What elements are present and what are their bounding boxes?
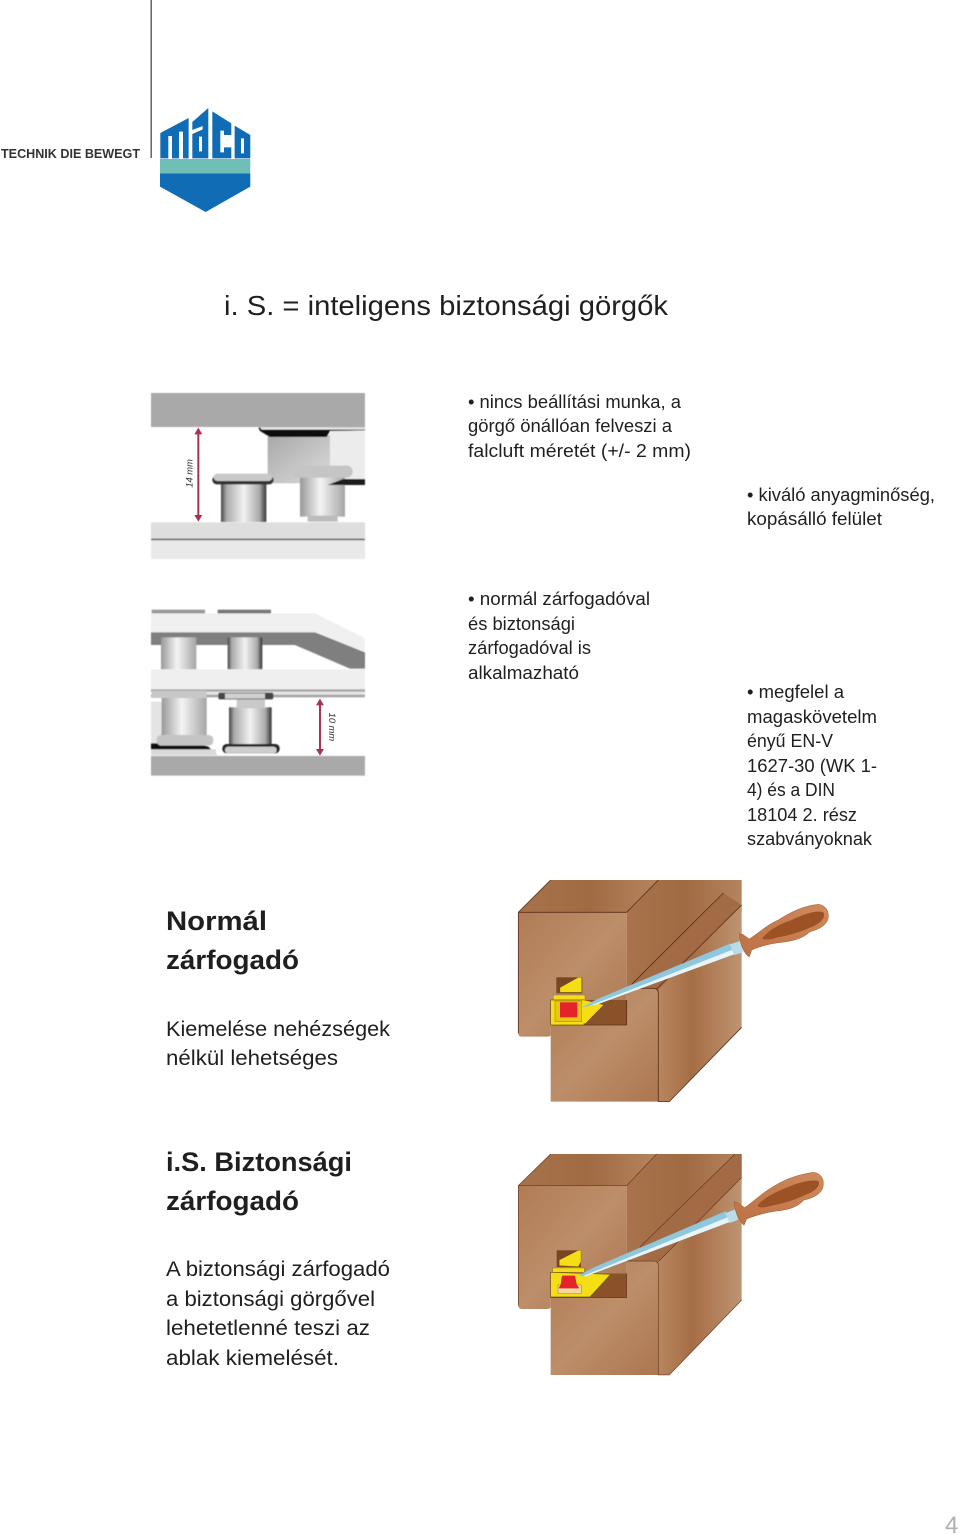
diagram part: yellow safety housing bbox=[551, 1250, 611, 1297]
title: i. S. = inteligens biztonsági görgők bbox=[224, 290, 669, 321]
heading: normal strike plate: Normál bbox=[166, 906, 267, 936]
bullet: strike plate compatibility: alkalmazható bbox=[468, 662, 579, 683]
bullet: material quality: • kiváló anyagminőség, bbox=[747, 484, 935, 505]
bullet: strike plate compatibility bbox=[468, 588, 650, 683]
photo: 10 mm roller gap: 10 mm bbox=[327, 713, 337, 741]
text: normal strike plate description: nélkül lehetséges bbox=[166, 1046, 338, 1070]
text: safety strike plate description: A biztonsági zárfogadó bbox=[166, 1257, 390, 1281]
bullet: strike plate compatibility: és biztonsági bbox=[468, 613, 575, 634]
vertical divider line bbox=[150, 0, 152, 158]
text: safety strike plate description: a biztonsági görgővel bbox=[166, 1287, 375, 1311]
heading: safety strike plate bbox=[166, 1147, 352, 1216]
heading: normal strike plate: zárfogadó bbox=[166, 945, 299, 975]
bullet: material quality bbox=[747, 484, 935, 529]
bullet: standards: magaskövetelm bbox=[747, 706, 877, 727]
bullet: material quality: kopásálló felület bbox=[747, 508, 882, 529]
heading: safety strike plate: zárfogadó bbox=[166, 1186, 299, 1216]
diagram: safety strike plate with screwdriver bbox=[518, 1154, 823, 1375]
bullet: no adjustment bbox=[468, 391, 691, 461]
bullet: standards: szabványoknak bbox=[747, 828, 873, 849]
text: safety strike plate description: lehetetlenné teszi az bbox=[166, 1316, 370, 1340]
bullet: no adjustment: görgő önállóan felveszi a bbox=[468, 415, 673, 436]
diagram part: screwdriver bbox=[582, 904, 828, 1007]
heading: normal strike plate bbox=[166, 906, 299, 975]
bullet: standards: 4) és a DIN bbox=[747, 779, 835, 800]
bullet: no adjustment: falcluft méretét (+/- 2 mm) bbox=[468, 440, 691, 461]
diagram part: yellow roller housing bbox=[551, 977, 603, 1025]
bullet: strike plate compatibility: • normál zárfogadóval bbox=[468, 588, 650, 609]
text: safety strike plate description bbox=[166, 1257, 390, 1370]
bullet: standards: • megfelel a bbox=[747, 681, 845, 702]
text: normal strike plate description bbox=[166, 1017, 390, 1070]
tagline: Technik die bewegt: TECHNIK DIE BEWEGT bbox=[1, 147, 140, 161]
photo: 14 mm roller gap: 14 mm bbox=[184, 459, 194, 488]
bullet: standards bbox=[747, 681, 877, 849]
photo: 14 mm roller gap bbox=[151, 393, 365, 559]
bullet: standards: 18104 2. rész bbox=[747, 804, 857, 825]
diagram: normal strike plate with screwdriver bbox=[518, 880, 828, 1102]
bullet: standards: 1627-30 (WK 1- bbox=[747, 755, 877, 776]
text: safety strike plate description: ablak kiemelését. bbox=[166, 1346, 339, 1370]
bullet: no adjustment: • nincs beállítási munka, a bbox=[468, 391, 682, 412]
diagram part: screwdriver bbox=[578, 1172, 823, 1277]
logo: maco bbox=[160, 108, 250, 212]
bullet: standards: ényű EN-V bbox=[747, 730, 834, 751]
text: normal strike plate description: Kiemelése nehézségek bbox=[166, 1017, 390, 1041]
photo: 10 mm roller gap bbox=[151, 610, 365, 776]
bullet: strike plate compatibility: zárfogadóval is bbox=[468, 637, 591, 658]
heading: safety strike plate: i.S. Biztonsági bbox=[166, 1147, 352, 1177]
